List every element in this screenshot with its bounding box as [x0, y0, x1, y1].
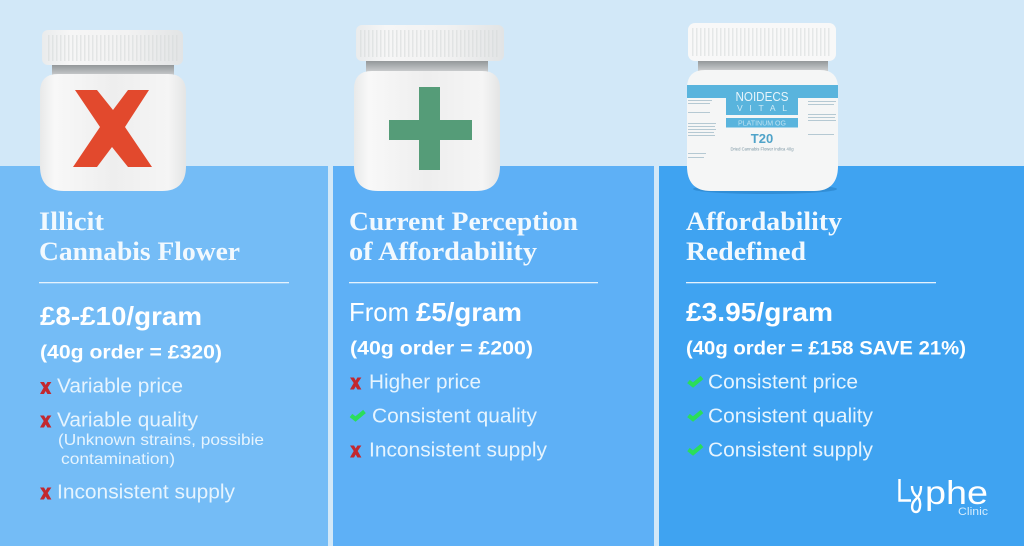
panel 1 list: Variable price [57, 376, 183, 398]
product label: PLATINUM OG [738, 118, 786, 128]
panel 2 list [350, 372, 547, 462]
panel 2 title: of Affordability [349, 237, 537, 266]
product label: Dried Cannabis Flower Indica 40g [730, 146, 794, 152]
panel 2 title: Current Perception [349, 207, 579, 236]
panel 1 title [39, 207, 240, 266]
panel: current perception of affordability [333, 166, 654, 546]
panel 1 list [40, 376, 264, 504]
product label: T20 [751, 131, 773, 146]
panel 3 list: Consistent price [708, 372, 858, 394]
panel 2 price [349, 297, 522, 327]
panel 1 list: (Unknown strains, possibie [58, 432, 264, 449]
panel 1 list: Inconsistent supply [57, 482, 235, 504]
panel 2 list: Higher price [369, 372, 481, 394]
panel 1 list: Variable quality [57, 410, 198, 432]
panel 3 price: £3.95/gram [686, 297, 833, 327]
icon: green plus mark [389, 87, 472, 170]
panel 3 title: Redefined [686, 237, 807, 266]
panel 2 list: Inconsistent supply [369, 440, 547, 462]
icon: green check [351, 412, 364, 419]
icon: green check [688, 378, 702, 385]
panel 2 list: Consistent quality [372, 406, 537, 428]
jar: Noidecs Vital product [687, 23, 838, 194]
panel 3 list: Consistent supply [708, 440, 873, 462]
panel 1 list: contamination) [61, 451, 175, 468]
panel: illicit cannabis flower [0, 166, 328, 546]
logo: Lyphe Clinic [900, 474, 989, 518]
logo: Lyphe Clinic: phe [925, 474, 988, 511]
icon: green check [688, 446, 702, 453]
panel 3 title: Affordability [686, 207, 842, 236]
panel 2 price: From [349, 297, 409, 327]
icon: red cross [350, 378, 361, 390]
panel 2 order total: (40g order = £200) [350, 338, 533, 360]
panel 1 order total: (40g order = £320) [40, 342, 222, 364]
logo: Lyphe Clinic: Clinic [958, 506, 989, 518]
icon: red cross [40, 416, 51, 428]
panel 3 list: Consistent quality [708, 406, 873, 428]
icon: red X mark [73, 90, 152, 167]
panel 2 title [349, 207, 579, 266]
panel 1 title: Illicit [39, 207, 104, 236]
panel 3 list [688, 372, 873, 462]
panel 3 title [686, 207, 842, 266]
product label: VITAL [737, 103, 787, 113]
panel 2 price: £5/gram [416, 297, 522, 327]
panel: affordability redefined [659, 166, 1024, 546]
icon: red cross [40, 488, 51, 500]
icon: red cross [350, 446, 361, 458]
icon: green check [688, 412, 702, 419]
panel 3 order total: (40g order = £158 SAVE 21%) [686, 338, 966, 360]
panel 1 price: £8-£10/gram [40, 301, 202, 331]
jar: green plus [354, 25, 504, 191]
icon: red cross [40, 382, 51, 394]
product label: NOIDECS [736, 90, 788, 104]
jar: red X [40, 30, 186, 191]
product label [687, 85, 838, 158]
panel 1 title: Cannabis Flower [39, 237, 240, 266]
